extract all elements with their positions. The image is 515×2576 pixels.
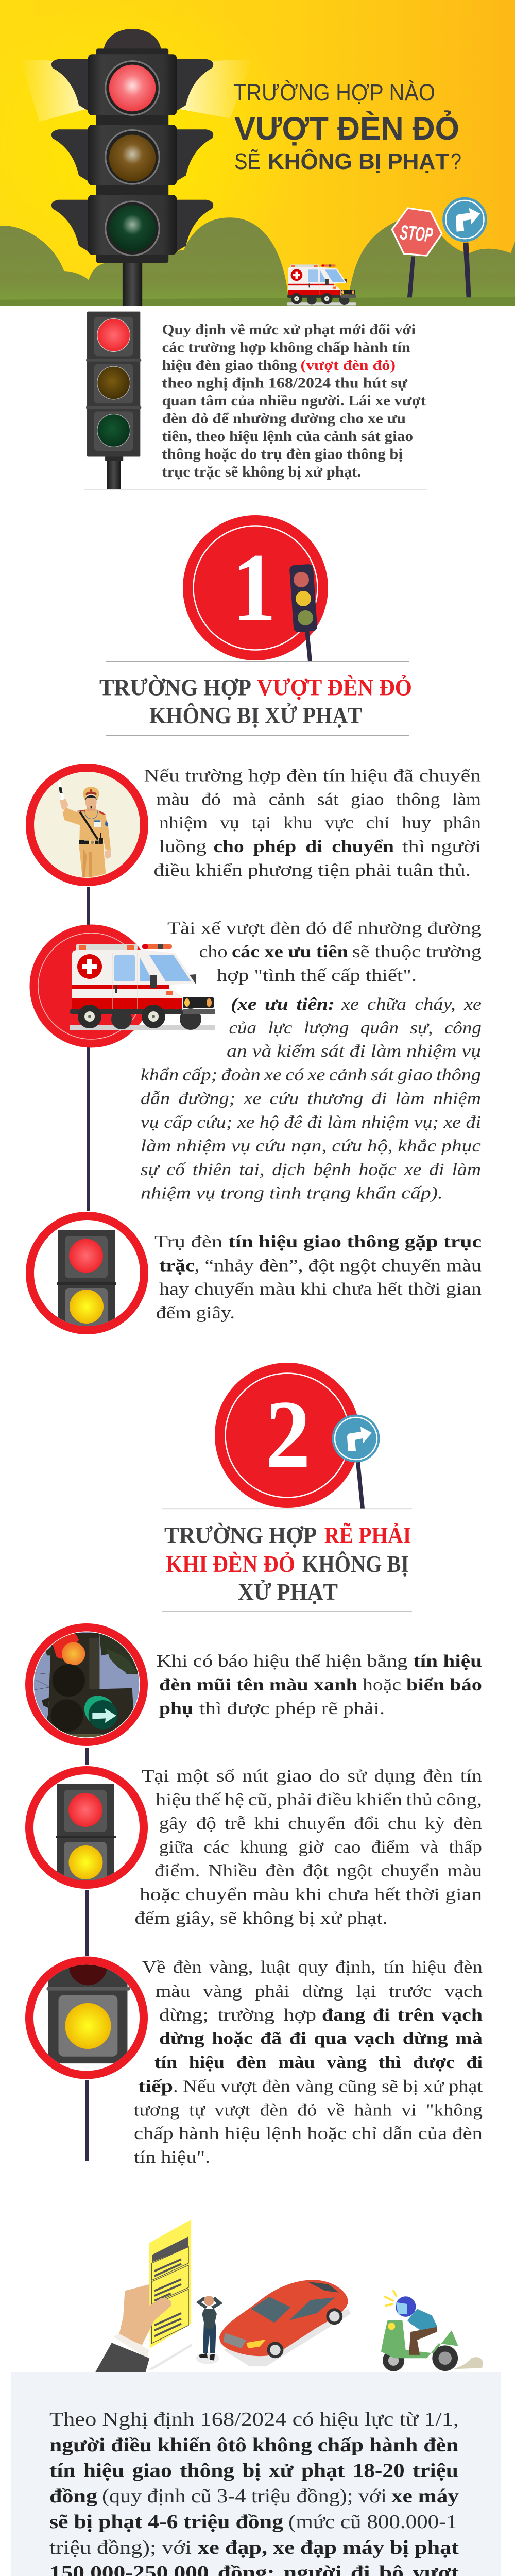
text: old generation signals	[135, 1767, 482, 1928]
text: priority vehicles: xe chữa cháy, xe	[341, 995, 482, 1014]
text: fines summary: (quy định cũ 3-4 triệu đồng); với	[102, 2485, 387, 2507]
text: faulty signal: , “nhảy đèn”, đột ngột chuyển màu	[195, 1256, 482, 1276]
text: old generation signals: điểm. Nhiều đèn đột ngột chuyển màu	[154, 1861, 482, 1880]
intro text: các trường hợp không chấp hành tín	[162, 340, 410, 355]
icon: intro traffic light	[86, 312, 141, 489]
section 2 heading: KHI ĐÈN ĐỎ	[166, 1551, 295, 1577]
text: green arrow signal: phụ	[159, 1699, 193, 1718]
text: yellow light rule: Về đèn vàng, luật quy định, tín hiệu đèn	[142, 1958, 483, 1977]
section 2 heading: KHÔNG BỊ	[302, 1551, 409, 1577]
text: yellow light rule: . Nếu vượt đèn vàng cũng sẽ bị xử phạt	[173, 2077, 483, 2096]
section 1 heading: KHÔNG BỊ XỬ PHẠT	[149, 702, 362, 728]
hero title: TRƯỜNG HỢP NÀO	[233, 79, 435, 106]
text: yellow light rule: dừng hoặc đã đi qua vạch dừng mà	[159, 2029, 483, 2048]
text: priority vehicles: hợp "tình thế cấp thiết".	[217, 966, 417, 985]
hero title: VƯỢT	[234, 111, 329, 147]
text: priority vehicles: Tài xế vượt đèn đỏ để nhường đường	[167, 919, 482, 938]
icon: arrow signal photo circle	[29, 1628, 144, 1742]
icon: yellow ticket	[149, 2219, 191, 2348]
hero illustration	[0, 29, 515, 306]
section 2 heading: TRƯỜNG HỢP	[164, 1522, 317, 1548]
text: fines summary: xe máy	[391, 2485, 459, 2507]
text: green arrow signal: thì được phép rẽ phải.	[199, 1699, 385, 1718]
intro text: (vượt đèn đỏ)	[301, 358, 396, 374]
text: priority vehicles: nhiệm vụ trong tình trạng khẩn cấp).	[141, 1184, 443, 1202]
section 1 badge	[183, 515, 328, 662]
bottom panel	[11, 2372, 501, 2576]
icon: red car	[219, 2280, 351, 2366]
text: yellow light rule: tiếp	[138, 2077, 173, 2096]
text: old generation signals: giữa các khung giờ cao điểm và thấp	[159, 1838, 482, 1857]
section 1 heading	[99, 661, 412, 736]
text: fines summary: triệu đồng); với	[49, 2537, 192, 2558]
text: priority vehicles: của lực lượng quân sự, công	[229, 1019, 482, 1038]
intro text: Quy định về mức xử phạt mới đối với	[162, 322, 416, 338]
hero title: KHÔNG BỊ PHẠT	[268, 148, 449, 174]
intro text: quan tâm của nhiều người. Lái xe vượt	[162, 393, 426, 409]
text: yellow light rule: tương tự vượt đèn đỏ về hành vi "không	[134, 2101, 483, 2120]
text: green arrow signal: biển báo	[406, 1675, 482, 1694]
connector lines section 2	[85, 1748, 89, 2161]
section 2 heading	[162, 1509, 412, 1612]
text: fines summary: xe đạp, xe đạp máy bị phạt	[198, 2537, 459, 2558]
text: faulty signal	[154, 1232, 482, 1323]
connector line section 1	[87, 887, 90, 1211]
icon: malfunctioning light circle	[30, 1216, 144, 1330]
icon: mini traffic light	[289, 564, 318, 662]
text: police directing: điều khiển phương tiện phải tuân thủ.	[153, 861, 471, 880]
text: police directing: màu đỏ mà cảnh sát giao thông làm	[157, 790, 481, 809]
text: green arrow signal: Khi có báo hiệu thể hiện bằng	[157, 1652, 408, 1671]
text: old generation signals: gây độ trễ khi chuyển đổi chu kỳ đèn	[159, 1814, 482, 1833]
text: police directing: luồng	[159, 837, 207, 856]
icon: old generation light circle	[29, 1770, 144, 1885]
text: old generation signals: hiệu thế hệ cũ, phải điều khiển thủ công,	[156, 1790, 482, 1809]
hero title: ?	[451, 149, 461, 174]
text: fines summary: người điều khiển ôtô không chấp hành đèn	[49, 2434, 458, 2456]
text: yellow light rule: chấp hành hiệu lệnh hoặc chỉ dẫn của đèn	[134, 2124, 483, 2143]
text: fines summary	[49, 2409, 459, 2576]
icon: stop sign: STOP	[399, 221, 434, 247]
text: priority vehicles: cho	[199, 942, 228, 961]
text: priority vehicles: làm nhiệm vụ cứu nạn, cứu hộ, khắc phục	[141, 1137, 481, 1156]
icon: mini turn sign	[332, 1415, 380, 1509]
text: fines summary: sẽ bị phạt 4-6 triệu đồng	[49, 2511, 283, 2533]
intro text: thông hoặc do trụ đèn giao thông bị	[162, 446, 403, 463]
icon: worried man	[196, 2296, 222, 2364]
intro text: theo nghị định 168/2024 thu hút sự	[162, 375, 408, 392]
text: yellow light rule: đang đi trên vạch	[322, 2006, 483, 2025]
text: priority vehicles: khẩn cấp; đoàn xe có xe cảnh sát giao thông	[141, 1065, 481, 1084]
intro panel	[84, 312, 427, 489]
text: priority vehicles: (xe ưu tiên:	[231, 995, 335, 1014]
text: priority vehicles: sự cố thiên tai, dịch bệnh hoặc xe đi làm	[141, 1160, 481, 1179]
hero title: SẼ	[234, 148, 261, 174]
text: priority vehicles: an và kiểm sát đi làm nhiệm vụ	[227, 1042, 481, 1061]
hero title	[233, 79, 461, 174]
icon: ambulance circle	[30, 924, 215, 1048]
text: green arrow signal: đèn mũi tên màu xanh	[159, 1675, 357, 1694]
text: faulty signal: trặc	[159, 1256, 195, 1276]
text: old generation signals: hoặc chuyển màu khi chưa hết thời gian	[140, 1885, 482, 1904]
icon: yellow light circle	[29, 1947, 144, 2075]
text: faulty signal: đếm giây.	[156, 1303, 235, 1323]
section 2 heading: RẼ PHẢI	[324, 1522, 411, 1548]
text: old generation signals: Tại một số nút giao do sử dụng đèn tín	[142, 1767, 482, 1786]
intro text: hiệu đèn giao thông	[162, 358, 297, 374]
text: green arrow signal: hoặc	[363, 1675, 401, 1694]
icon: traffic police circle	[30, 768, 144, 882]
text: priority vehicles: vụ cấp cứu; xe hộ đê đi làm nhiệm vụ; xe đi	[141, 1113, 481, 1132]
text: faulty signal: tín hiệu giao thông gặp trục	[228, 1232, 482, 1251]
section 1 badge: 1	[232, 534, 276, 642]
hero title: ĐÈN ĐỎ	[337, 110, 459, 147]
section 2 badge	[215, 1363, 380, 1509]
text: fines summary: (mức cũ 800.000-1	[288, 2511, 457, 2533]
icon: large traffic light	[52, 29, 213, 306]
text: green arrow signal: tín hiệu	[413, 1652, 482, 1671]
icon: small ambulance	[287, 264, 356, 305]
intro text: đèn đỏ để nhường đường cho xe ưu	[162, 411, 406, 427]
text: police directing: cho phép di chuyển	[213, 837, 394, 856]
section 2 heading: XỬ PHẠT	[238, 1579, 338, 1605]
text: green arrow signal	[157, 1652, 482, 1718]
icon: scooter rider	[381, 2291, 483, 2371]
hero banner	[0, 0, 515, 306]
text: police directing: nhiệm vụ tại khu vực chỉ huy phân	[159, 814, 481, 833]
illustration: fine ticket, car and scooter	[95, 2219, 483, 2372]
intro text: trục trặc sẽ không bị xử phạt.	[162, 464, 361, 480]
icon: turn-right sign	[442, 197, 487, 297]
text: yellow light rule: tín hiệu đèn màu vàng thì được đi	[154, 2053, 483, 2072]
text: police directing: thì người	[402, 837, 481, 856]
icon: hand and sleeve	[95, 2284, 171, 2372]
icon: stop sign	[390, 207, 444, 257]
text: fines summary: Theo Nghị định 168/2024 có hiệu lực từ 1/1,	[49, 2409, 459, 2430]
text: faulty signal: Trụ đèn	[154, 1232, 222, 1251]
text: old generation signals: đếm giây, sẽ không bị xử phạt.	[135, 1909, 387, 1928]
text: yellow light rule: tín hiệu".	[134, 2148, 210, 2167]
text: yellow light rule: dừng; trường hợp	[159, 2006, 316, 2025]
text: priority vehicles: các xe ưu tiên	[232, 942, 348, 961]
text: priority vehicles: dẫn đường; xe cứu thương đi làm nhiệm	[141, 1089, 481, 1108]
text: faulty signal: hay chuyển màu khi chưa hết thời gian	[159, 1280, 482, 1299]
text: yellow light rule	[134, 1958, 483, 2167]
intro text	[162, 322, 426, 480]
text: priority vehicles	[141, 919, 482, 1202]
section 1 heading: TRƯỜNG HỢP	[99, 674, 251, 701]
section 2 badge: 2	[265, 1381, 311, 1489]
text: priority vehicles: sẽ thuộc trường	[352, 942, 482, 961]
section 1 heading: VƯỢT ĐÈN ĐỎ	[257, 674, 412, 701]
text: fines summary: đồng	[49, 2485, 97, 2507]
text: fines summary: tín hiệu giao thông bị xử phạt 18-20 triệu	[49, 2460, 458, 2481]
intro text: tiên, theo hiệu lệnh của cảnh sát giao	[162, 429, 413, 445]
text: police directing	[144, 767, 481, 880]
text: police directing: Nếu trường hợp đèn tín hiệu đã chuyển	[144, 767, 481, 785]
text: yellow light rule: màu vàng phải dừng lại trước vạch	[156, 1982, 483, 2001]
